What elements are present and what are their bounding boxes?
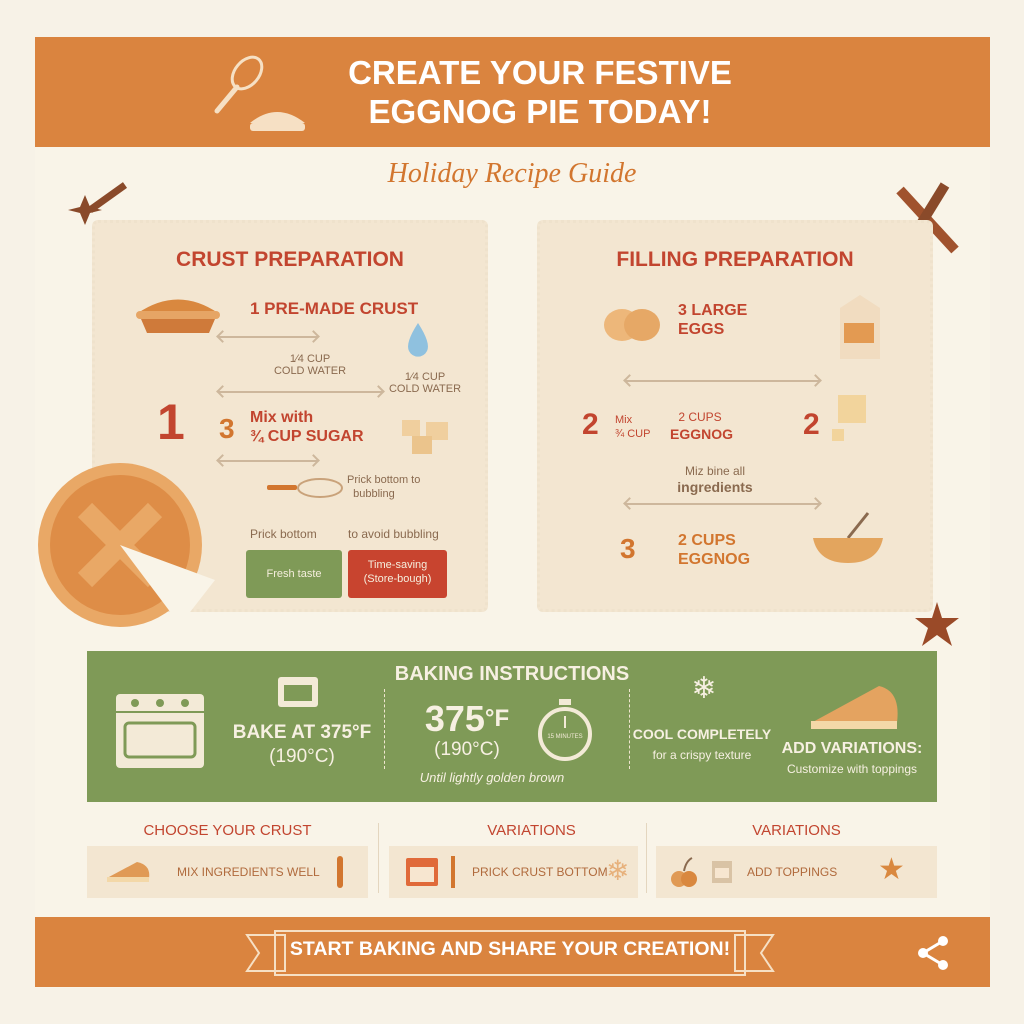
icon: whisk [267, 478, 343, 498]
footer text: START BAKING AND SHARE YOUR CREATION! [290, 938, 730, 960]
bottom column: choose your crust: MIX INGREDIENTS WELL [177, 865, 320, 879]
icon: star anise left [68, 182, 127, 225]
panel: filling preparation: ¾ CUP [615, 428, 650, 440]
bottom column: variations 2: VARIATIONS [752, 822, 841, 839]
title [348, 54, 732, 130]
panel: crust preparation: bubbling [353, 488, 395, 500]
panel: filling preparation: 3 [620, 533, 636, 564]
icon: eggs [604, 309, 660, 341]
big step 1: 1 [157, 394, 185, 450]
panel: baking instructions: (190°C) [434, 739, 500, 760]
panel: crust preparation: ¾ CUP SUGAR [250, 428, 364, 445]
icon: eggnog carton [840, 295, 880, 359]
heading: FILLING PREPARATION [616, 248, 854, 271]
title: CREATE YOUR FESTIVE [348, 54, 732, 91]
icon: star anise bottom right [915, 602, 959, 646]
panel: filling preparation: 2 CUPS [678, 410, 722, 424]
icon: whisk and pie [214, 56, 305, 131]
text: 1 pre-made crust: 1 PRE-MADE CRUST [250, 299, 418, 318]
bottom column: choose your crust [87, 822, 368, 898]
bottom column: variations 1: VARIATIONS [487, 822, 576, 839]
button: time-saving: Time-saving [368, 559, 427, 571]
text: cool completely: for a crispy texture [653, 748, 751, 762]
panel: filling preparation: EGGS [678, 321, 724, 338]
icon: sugar cubes [402, 420, 448, 454]
icon: timer: 15 MINUTES [547, 734, 583, 740]
text: add variations [782, 740, 922, 776]
icon: pie slice [811, 686, 898, 729]
panel: filling preparation: EGGNOG [670, 426, 733, 442]
text: bake at: BAKE AT 375°F [233, 722, 371, 743]
icon: butter cubes [832, 395, 866, 441]
header banner [35, 37, 990, 147]
icon: pie [136, 300, 220, 333]
icon: small oven [278, 677, 318, 707]
text: bake at [233, 722, 371, 767]
button: time-saving: (Store-bough) [364, 573, 431, 585]
panel: baking instructions: Until lightly golden brown [420, 770, 564, 785]
bottom column: variations 1: ❄ [606, 855, 629, 886]
icon: timer [538, 699, 592, 761]
button: fresh taste: Fresh taste [266, 568, 322, 580]
bottom column: variations 1 [389, 822, 638, 898]
panel: crust preparation: 1⁄4 CUP [290, 353, 330, 365]
icon: cinnamon sticks right [896, 182, 959, 254]
heading: CRUST PREPARATION [176, 248, 404, 271]
icon: snowflake: ❄ [691, 672, 717, 705]
icon: oven [116, 694, 204, 768]
panel: crust preparation: Mix with [250, 409, 313, 426]
panel: filling preparation: Miz bine all [685, 464, 745, 478]
text: add variations: Customize with toppings [787, 762, 917, 776]
icon: big pie slice [38, 463, 215, 627]
panel: crust preparation: COLD WATER [274, 365, 346, 377]
panel: crust preparation: 3 [219, 413, 235, 444]
icon: water drop [408, 323, 428, 357]
panel: filling preparation: Mix [615, 414, 632, 426]
bottom column: variations 1: PRICK CRUST BOTTOM [472, 865, 608, 879]
panel: crust preparation: 1⁄4 CUP [405, 371, 445, 383]
panel: filling preparation: EGGNOG [678, 551, 750, 568]
panel: filling preparation: 3 LARGE [678, 302, 747, 319]
panel: crust preparation: to avoid bubbling [348, 527, 439, 541]
panel: filling preparation: 2 [803, 408, 820, 441]
ribbon [245, 930, 775, 976]
subtitle: Holiday Recipe Guide [388, 158, 636, 189]
panel: baking instructions [87, 651, 937, 802]
panel: crust preparation: Prick bottom to [347, 474, 420, 486]
button: fresh taste [246, 550, 342, 598]
icon: share [918, 936, 948, 970]
text: cool completely: COOL COMPLETELY [633, 726, 771, 742]
heading: BAKING INSTRUCTIONS [395, 663, 629, 685]
text: bake at: (190°C) [269, 746, 335, 767]
text: 375F: 375°F [425, 698, 509, 739]
title: EGGNOG PIE TODAY! [369, 93, 711, 130]
bottom column: choose your crust: CHOOSE YOUR CRUST [143, 822, 312, 839]
panel: filling preparation: 2 [582, 408, 599, 441]
panel: crust preparation: Prick bottom [250, 527, 317, 541]
bottom column: variations 2: ADD TOPPINGS [747, 865, 837, 879]
panel: filling preparation [537, 220, 933, 612]
bottom column: variations 2: ★ [878, 853, 905, 886]
panel: crust preparation: COLD WATER [389, 383, 461, 395]
text: cool completely [633, 726, 771, 762]
button: time-saving [348, 550, 447, 598]
panel: filling preparation: ingredients [677, 479, 753, 495]
panel: filling preparation: 2 CUPS [678, 532, 736, 549]
text: add variations: ADD VARIATIONS: [782, 740, 922, 757]
footer banner [35, 917, 990, 987]
panel: crust preparation [92, 220, 488, 612]
icon: mixing bowl [813, 512, 883, 563]
bottom column: variations 2 [656, 822, 937, 898]
